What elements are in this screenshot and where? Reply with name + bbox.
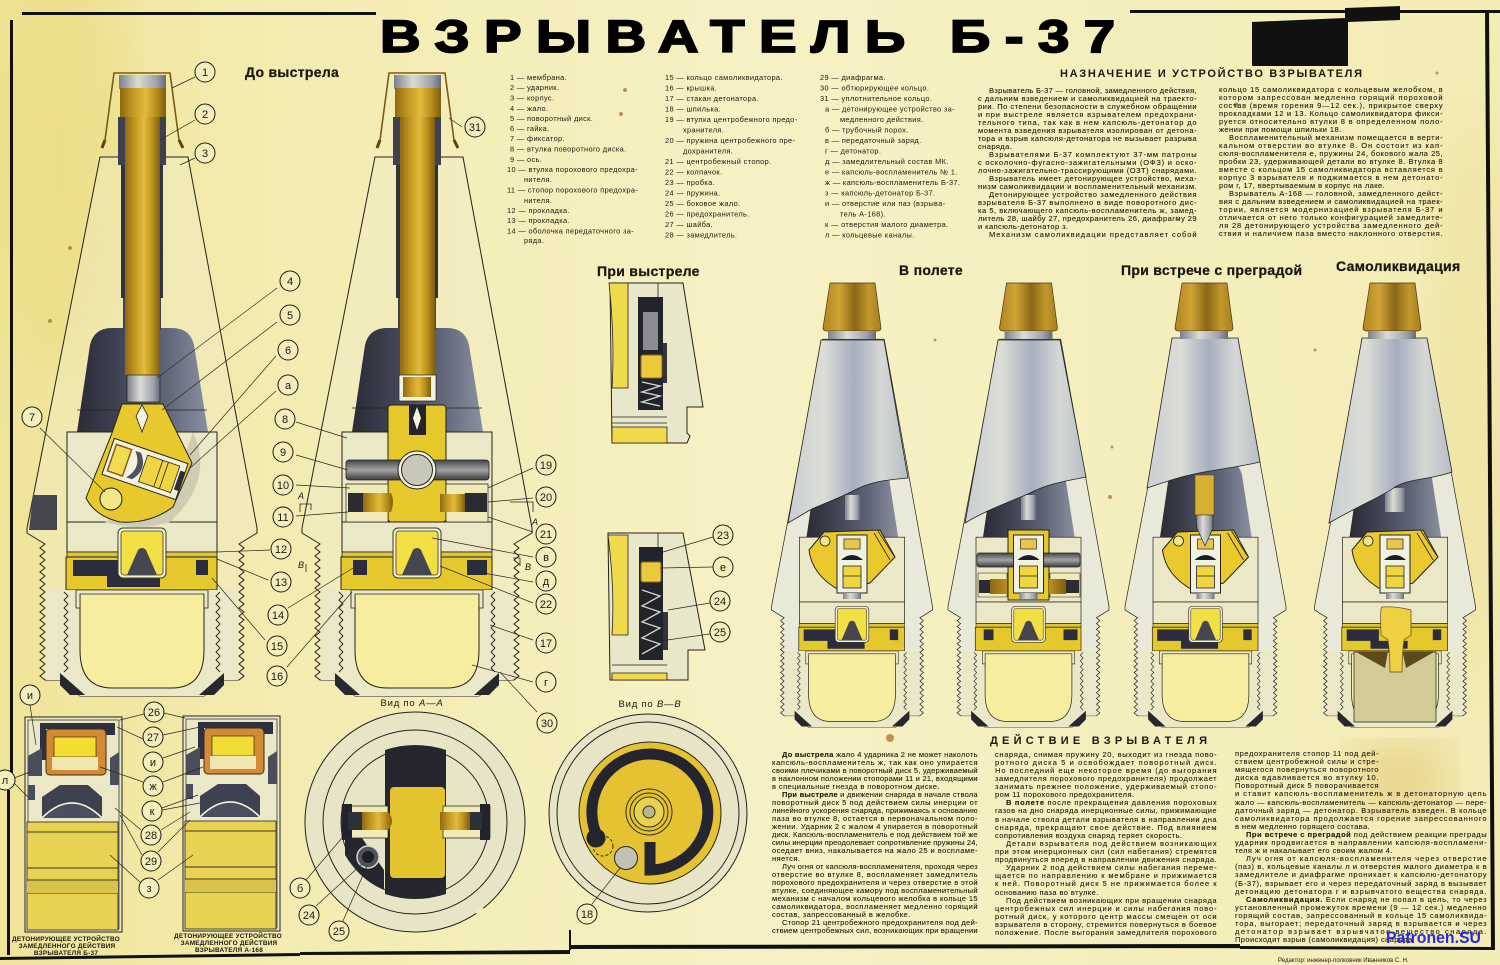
legend of parts: 3 — корпус. <box>510 94 554 102</box>
side view: spring <box>608 533 705 680</box>
legend of parts: д — замедлительный состав МК. <box>825 157 949 166</box>
callouts: detonating device: ж <box>149 781 157 793</box>
text: action of the fuse: Происходит взрыв (самоликвидация) снаряда. <box>1235 935 1415 944</box>
leader lines and callouts: main fuses: 19 <box>540 460 552 472</box>
section view A-A <box>305 698 525 932</box>
heading: firing: При выстреле <box>597 263 700 279</box>
text: action of the fuse: жало — капсюль-воспламенитель — капсюль-детонатор — пере- <box>1235 798 1487 807</box>
legend of parts: 17 — стакан детонатора. <box>665 94 759 103</box>
text: purpose and design: кальном отверстии во втулке 8. Он состоит из кап- <box>1219 141 1443 150</box>
leader lines and callouts: main fuses: д <box>543 576 550 588</box>
text: purpose and design: низм самоликвидации и воспламенительный механизм. <box>978 182 1197 191</box>
callouts: detonating device: 29 <box>145 856 157 868</box>
callouts: section A-A <box>290 838 367 941</box>
text: purpose and design: момента взведения взрывателя изолирован от детона- <box>978 126 1197 135</box>
text: purpose and design <box>978 85 1443 239</box>
text: purpose and design: с дальним взведением и самоликвидацией на траекто- <box>978 94 1197 103</box>
text: purpose and design: Детонирующее устройство замедленного действия <box>989 190 1197 199</box>
leader lines and callouts: main fuses: а <box>285 380 292 392</box>
text: action of the fuse: даточный заряд — детонатор. Взрыватель взведен. В кольце <box>1235 806 1487 815</box>
legend of parts: 9 — ось. <box>510 155 542 164</box>
text: action of the fuse: паза во втулке 8, остается в первоначальном поло- <box>772 814 978 823</box>
caption: detonating device B-37: ЗАМЕДЛЕННОГО ДЕЙСТВИЯ <box>19 941 116 950</box>
text: action of the fuse: при этом инерционных сил (сил набегания) стремятся <box>995 847 1217 856</box>
text: action of the fuse: Луч огня от капсюля-воспламенителя, проходя через <box>782 862 978 871</box>
callouts: detonating device: 27 <box>147 732 159 744</box>
legend of parts: нителя. <box>524 196 552 205</box>
leader lines and callouts: main fuses: В <box>525 562 531 572</box>
leader lines and callouts: main fuses: 1 <box>202 67 208 79</box>
text: action of the fuse: снаряда, прекращают свое действие. Под влиянием <box>995 823 1217 832</box>
text: purpose and design: Механизм самоликвидации представляет собой <box>989 230 1197 239</box>
legend of parts: тель А-168). <box>840 210 886 218</box>
fuse: at impact <box>1125 283 1286 727</box>
leader lines and callouts: main fuses: 22 <box>540 599 552 611</box>
leader lines and callouts: main fuses: 12 <box>275 544 287 556</box>
text: action of the fuse: замедлителя порохового предохранителя) продолжает <box>995 774 1217 783</box>
legend of parts: 15 — кольцо самоликвидатора. <box>665 73 783 82</box>
leader lines and callouts: main fuses: 8 <box>282 414 288 426</box>
legend of parts: к — отверстия малого диаметра. <box>825 220 948 229</box>
caption: detonating device A-168: ДЕТОНИРУЮЩЕЕ УСТРОЙСТВО <box>174 931 282 940</box>
text: purpose and design: тора и взрыв капсюля-детонатора не вызывает разрыва <box>978 134 1197 143</box>
text: purpose and design: лочно-зажигательно-трассирующими (ОЗТ) снарядами. <box>978 166 1197 175</box>
section view B-B: Вид по В—В <box>618 699 682 710</box>
leader lines and callouts: main fuses: 16 <box>271 671 283 683</box>
text: action of the fuse: оседает вниз, накалывается на жало 25 и воспламе- <box>772 846 978 855</box>
callouts: detonating device: 26 <box>148 707 160 719</box>
section view B-B <box>549 699 747 912</box>
fuse diagram: before firing, cross cut <box>302 73 532 696</box>
text: action of the fuse: капсюль-воспламенитель ж, так как оно упирается <box>772 758 978 767</box>
text: action of the fuse: (паз) в, кольцевые каналы л и отверстия малого диаметра к в <box>1235 862 1487 871</box>
callouts: spring view: 23 <box>717 530 729 542</box>
text: purpose and design: тельного типа, так как в нем капсюль-детонатор до <box>978 118 1197 127</box>
title: ВЗРЫВАТЕЛЬ Б-37 <box>380 11 1115 62</box>
fuse: in flight, safe <box>772 283 932 727</box>
text: action of the fuse: Стопор 21 центробежного предохранителя под дей- <box>782 918 978 927</box>
text: action of the fuse: в наклонном положении стопорами 11 и 21, входящими <box>772 774 978 783</box>
legend of parts: 4 — жало. <box>510 104 548 113</box>
callouts: detonating device: л <box>2 775 8 787</box>
fuse: self-destruction <box>1314 283 1476 727</box>
headings: stages <box>899 258 1460 278</box>
text: purpose and design: ля 28 детонирующего устройства замедленного дей- <box>1219 221 1443 230</box>
legend of parts: 29 — диафрагма. <box>820 73 886 82</box>
text: action of the fuse: самоликвидатора, воспламеняет медленно горящий <box>772 902 978 911</box>
headings: stages: При встрече с преградой <box>1121 262 1302 278</box>
legend of parts: 6 — гайка. <box>510 124 549 133</box>
fuse: in flight, armed <box>948 283 1109 727</box>
text: action of the fuse: замедлителе и диафрагме проникает к капсюлю-детонатору <box>1235 870 1487 879</box>
leader lines and callouts: main fuses: 31 <box>469 122 481 134</box>
leader lines and callouts: main fuses: 10 <box>277 480 289 492</box>
leader lines and callouts: main fuses <box>22 62 557 733</box>
text: action of the fuse: Но последний еще некоторое время (до выгорания <box>995 766 1217 775</box>
text: action of the fuse: ром 11 порохового предохранителя. <box>995 790 1134 799</box>
text: action of the fuse: ствием центробежной силы и стре- <box>1235 757 1379 766</box>
legend of parts: ряда. <box>524 236 544 245</box>
text: action of the fuse: При встрече с преградой под действием реакции преграды <box>1246 830 1487 839</box>
legend of parts: 25 — боковое жало. <box>665 199 741 208</box>
legend of parts: хранителя. <box>683 126 724 134</box>
leader lines and callouts: main fuses: 13 <box>275 577 287 589</box>
text: action of the fuse: диска вдавливается во втулку 10. <box>1235 773 1379 782</box>
legend of parts: 30 — обтюрирующее кольцо. <box>820 84 929 92</box>
leader lines and callouts: main fuses: г <box>544 677 548 689</box>
leader lines and callouts: main fuses: В <box>298 560 304 570</box>
text: action of the fuse: состав, запрессованный в желобке. <box>772 910 911 919</box>
legend of parts: и — отверстие или паз (взрыва- <box>825 199 946 208</box>
legend of parts: 24 — пружина. <box>665 188 720 198</box>
legend of parts: 11 — стопор порохового предохра- <box>507 186 638 194</box>
leader lines and callouts: main fuses: 30 <box>541 718 553 730</box>
text: purpose and design: кольцо 15 самоликвидатора с кольцевым желобком, в <box>1219 85 1443 94</box>
legend of parts: 26 — предохранитель. <box>665 210 750 218</box>
text: purpose and design: вместе с кольцом 15 самоликвидатора вставляется в <box>1219 165 1443 174</box>
legend of parts: медленного действия. <box>840 115 923 124</box>
text: action of the fuse: механизм с началом кольцевого желобка в кольце 15 <box>772 894 978 903</box>
caption: detonating device B-37: ДЕТОНИРУЮЩЕЕ УСТРОЙСТВО <box>12 934 120 943</box>
watermark: Patronen.SU <box>1386 928 1481 947</box>
callouts: section A-A: б <box>297 883 303 895</box>
leader lines and callouts: main fuses: 15 <box>271 641 283 653</box>
text: purpose and design: взрывателя Б-37 выполнено в виде поворотного дис- <box>978 198 1197 207</box>
text: purpose and design: и при выстреле является взрывателем предохрани- <box>978 110 1197 119</box>
caption: detonating device A-168: ВЗРЫВАТЕЛЯ А-168 <box>195 947 263 954</box>
text: action of the fuse: детонатор взрывает взрывчатое вещество снаряда. <box>1235 927 1487 936</box>
text: purpose and design: прокладками 12 и 13. Кольцо самоликвидатора фикси- <box>1219 109 1443 118</box>
legend of parts: 27 — шайба. <box>665 220 713 229</box>
text: purpose and design: руется относительно втулки 8 в определенном поло- <box>1219 117 1443 126</box>
text: action of the fuse: тора, выгорает; передаточный заряд в взрывается и через <box>1235 919 1487 928</box>
text: action of the fuse: мящегося повернуться поворотного <box>1235 765 1379 774</box>
text: action of the fuse: взрывателя в сторону, стремится повернуться в боевое <box>995 920 1217 929</box>
text: purpose and design: рии. По степени безопасности в служебном обращении <box>978 102 1197 111</box>
legend of parts: 8 — втулка поворотного диска. <box>510 144 626 154</box>
text: action of the fuse: газов на дно снаряда инерционные силы, прижимающие <box>995 806 1217 815</box>
caption: detonating device A-168: ЗАМЕДЛЕННОГО ДЕЙСТВИЯ <box>181 938 278 947</box>
leader lines and callouts: main fuses: в <box>543 552 549 564</box>
legend of parts: 2 — ударник. <box>510 83 559 92</box>
legend of parts: 13 — прокладка. <box>507 216 570 225</box>
legend of parts: 1 — мембрана. <box>510 73 567 82</box>
legend of parts: а — детонирующее устройство за- <box>825 104 955 114</box>
text: action of the fuse: сопротивления воздуха снаряд теряет скорость. <box>995 831 1182 840</box>
leader lines and callouts: main fuses: А <box>531 517 538 527</box>
callouts: spring view <box>660 525 733 642</box>
caption: detonating device B-37 <box>12 934 120 957</box>
text: action of the fuse: центробежных сил инерции и силы набегания пово- <box>995 904 1217 913</box>
text: action of the fuse: ударник продвигается в направлении капсюля-воспламени- <box>1235 838 1487 847</box>
legend of parts: 18 — шпилька. <box>665 104 721 114</box>
text: action of the fuse: Самоликвидация. Если снаряд не попал в цель, то через <box>1246 895 1487 904</box>
text: purpose and design: пробки 23, удерживающей детали во втулке 8. Втулка 8 <box>1219 157 1443 166</box>
legend of parts: 10 — втулка порохового предохра- <box>507 165 638 174</box>
legend of parts: 21 — центробежный стопор. <box>665 157 772 166</box>
heading: purpose and design: НАЗНАЧЕНИЕ И УСТРОЙСТВО ВЗРЫВАТЕЛЯ <box>1060 67 1365 80</box>
text: purpose and design: ка 5, включающего капсюль-воспламенитель ж, замед- <box>978 206 1197 215</box>
text: purpose and design: ствия и наличием паза вместо наклонного отверстия. <box>1219 229 1443 238</box>
heading: action of the fuse: ДЕЙСТВИЕ ВЗРЫВАТЕЛЯ <box>990 734 1210 747</box>
text: purpose and design: ром г, 17, ввертываемым в корпус на лаке. <box>1219 181 1385 190</box>
text: action of the fuse: в специальные гнезда в поворотном диске. <box>772 782 940 791</box>
headings: stages: В полете <box>899 262 963 278</box>
legend of parts: дохранителя. <box>683 146 733 156</box>
legend of parts: 16 — крышка. <box>665 84 717 92</box>
leader lines and callouts: main fuses: 4 <box>287 276 293 288</box>
text: action of the fuse: В полете после прекращения давления пороховых <box>1006 798 1217 807</box>
text: action of the fuse: самоликвидатора продолжается горение запрессованного <box>1235 814 1487 823</box>
legend of parts: ж — капсюль-воспламенитель Б-37. <box>825 178 960 187</box>
text: action of the fuse: При выстреле и движении снаряда в начале ствола <box>782 790 978 799</box>
callouts: spring view: е <box>720 562 726 574</box>
leader lines and callouts: main fuses: 5 <box>287 310 293 322</box>
text: purpose and design: Взрывателями Б-37 комплектуют 37-мм патроны <box>989 150 1197 159</box>
text: action of the fuse: Ударник 2 под действием силы набегания переме- <box>1006 863 1217 872</box>
text: action of the fuse: поворотный диск 5 под действием силы инерции от <box>772 798 978 807</box>
legend of parts: 14 — оболочка передаточного за- <box>507 226 634 236</box>
legend of parts: з — капсюль-детонатор Б-37. <box>825 188 935 198</box>
text: action of the fuse: ствием центробежных сил, возникающих при вращении <box>772 926 978 935</box>
side view: at firing <box>609 283 703 443</box>
text: action of the fuse: жении. Ударник 2 с жалом 4 упирается в поворотный <box>772 822 978 831</box>
text: action of the fuse: Детали взрывателя под действием возникающих <box>1006 839 1217 848</box>
text: action of the fuse: своими плечиками в поворотный диск 5, удерживаемый <box>772 766 978 775</box>
leader lines and callouts: main fuses: 7 <box>29 412 35 424</box>
text: action of the fuse: в начале ствола детали взрывателя в направлении дна <box>995 815 1217 824</box>
text: action of the fuse: Под действием возникающих при вращении снаряда <box>1006 896 1217 905</box>
section view A-A: Вид по А—А <box>380 698 444 709</box>
text: action of the fuse: продвинуться вперед в направлении движения снаряда. <box>995 855 1217 864</box>
text: action of the fuse: и ставит капсюль-воспламенитель ж в детонаторную цепь <box>1235 789 1487 798</box>
text: action of the fuse: ротный диск, у которого центр массы смещен от оси <box>995 912 1217 921</box>
text: purpose and design: корпус 3 взрывателя и поджимается в нем детонато- <box>1219 173 1443 182</box>
legend of parts: 23 — пробка. <box>665 178 715 187</box>
legend of parts: 19 — втулка центробежного предо- <box>665 115 798 124</box>
callouts: spring view: 24 <box>714 596 726 608</box>
headings: stages: Самоликвидация <box>1336 258 1460 274</box>
text: purpose and design: с осколочно-фугасно-зажигательными (ОФЗ) и оско- <box>978 158 1197 167</box>
text: action of the fuse: втулке, соединяющее камору под воспламенительный <box>772 886 978 895</box>
legend of parts: г — детонатор. <box>825 146 881 156</box>
callouts: section B-B: 18 <box>581 909 593 921</box>
text: action of the fuse: силы инерции преодолевает сопротивление пружины 24, <box>772 838 978 847</box>
text: purpose and design: сюля-воспламенителя е, пружины 24, бокового жала 25, <box>1219 149 1443 158</box>
text: action of the fuse: горящий состав, запрессованный в кольце 15 самоликвида- <box>1235 911 1487 920</box>
text: action of the fuse: отверстие во втулке 8, воспламеняет замедлитель <box>772 870 978 879</box>
legend of parts: 12 — прокладка. <box>507 206 570 215</box>
text: action of the fuse: Луч огня от капсюля-воспламенителя через отверстие <box>1246 854 1487 863</box>
footer credit: Редактор: инженер-полковник Иванников С. Н. <box>1278 958 1409 964</box>
legend of parts: 28 — замедлитель. <box>665 230 737 240</box>
legend of parts: 22 — колпачок. <box>665 168 722 176</box>
text: action of the fuse: установленный промежуток времени (9 — 12 сек.) медленно <box>1235 903 1487 912</box>
callouts: detonating device: и <box>27 690 33 702</box>
text: purpose and design: Воспламенительный механизм помещается в верти- <box>1229 133 1443 142</box>
text: action of the fuse: в нем медленно горящего состава. <box>1235 822 1370 831</box>
text: action of the fuse <box>772 749 1487 944</box>
callouts: spring view: 25 <box>714 627 726 639</box>
text: purpose and design: снаряда. <box>978 142 1012 151</box>
text: purpose and design: жении при помощи шпильки 18. <box>1219 125 1342 134</box>
text: purpose and design: и капсюль-детонатор з. <box>978 222 1068 231</box>
leader lines and callouts: main fuses: 20 <box>540 492 552 504</box>
text: purpose and design: Взрыватель А-168 — головной, замедленного дейст- <box>1229 189 1443 198</box>
detonating device assemblies <box>25 716 280 932</box>
legend of parts <box>507 73 960 245</box>
leader lines and callouts: main fuses: 17 <box>540 638 552 650</box>
callouts: detonating device: и <box>150 757 156 769</box>
text: action of the fuse: ротного диска 5 и освобождает поворотный диск. <box>995 758 1217 767</box>
leader lines and callouts: main fuses: 9 <box>280 447 286 459</box>
text: action of the fuse: няется. <box>772 854 800 863</box>
legend of parts: нителя. <box>524 175 552 184</box>
text: action of the fuse: диск. Капсюль-воспламенитель е под действием той же <box>772 830 978 839</box>
text: purpose and design: отличается от него только конфигурацией замедлите- <box>1219 213 1443 222</box>
caption: detonating device A-168 <box>174 931 282 954</box>
text: action of the fuse: щается по направлению к мембране и прижимается <box>995 871 1217 880</box>
text: action of the fuse: снаряда, снимая пружину 20, выходит из гнезда пово- <box>995 750 1217 759</box>
callouts: detonating device: 28 <box>145 830 157 842</box>
callouts: detonating device <box>0 685 203 898</box>
text: action of the fuse: основанию паза во втулке. <box>995 888 1099 897</box>
legend of parts: 20 — пружина центробежного пре- <box>665 136 796 145</box>
leader lines and callouts: main fuses: 14 <box>272 610 284 622</box>
callouts: section B-B <box>577 868 620 924</box>
leader lines and callouts: main fuses: 11 <box>277 512 289 524</box>
callouts: section A-A: 24 <box>303 910 315 922</box>
text: action of the fuse: До выстрела жало 4 ударника 2 не может наколоть <box>782 750 978 759</box>
text: action of the fuse: (Б-37), взрывает его и через передаточный заряд в вызывает <box>1235 879 1487 888</box>
leader lines and callouts: main fuses: А <box>297 491 304 501</box>
legend of parts: 31 — уплотнительное кольцо. <box>820 94 932 103</box>
leader lines and callouts: main fuses: 21 <box>540 529 552 541</box>
legend of parts: е — капсюль-воспламенитель № 1. <box>825 168 958 176</box>
leader lines and callouts: main fuses: 2 <box>202 109 208 121</box>
text: purpose and design: вия с дальним взведением и самоликвидацией на траек- <box>1219 197 1443 206</box>
text: action of the fuse: детонацию детонатора г и взрывчатого вещества снаряда. <box>1235 887 1487 896</box>
text: purpose and design: тории, является модернизацией взрывателя Б-37 и <box>1219 205 1443 214</box>
legend of parts: л — кольцевые каналы. <box>825 230 915 240</box>
text: action of the fuse: положение. После выгорания замедлителя порохового <box>995 928 1217 937</box>
caption: detonating device B-37: ВЗРЫВАТЕЛЯ Б-37 <box>34 950 98 957</box>
leader lines and callouts: main fuses: 3 <box>202 148 208 160</box>
text: purpose and design: Взрыватель Б-37 — головной, замедленного действия, <box>989 86 1197 95</box>
legend of parts: 7 — фиксатор. <box>510 134 565 143</box>
leader lines and callouts: main fuses: 6 <box>285 345 291 357</box>
text: purpose and design: котором запрессован медленно горящий пороховой <box>1219 93 1443 102</box>
fuse diagram: before firing, side cut <box>27 73 257 696</box>
text: action of the fuse: предохранителя стопор 11 под дей- <box>1235 749 1379 758</box>
text: action of the fuse: занимать прежнее положение, удерживаемый стопо- <box>995 782 1217 791</box>
text: action of the fuse: порохового предохранителя и через отверстие в этой <box>772 878 978 887</box>
legend of parts: 5 — поворотный диск. <box>510 114 593 123</box>
text: purpose and design: состав (время горения 9—12 сек.), прикрытое сверху <box>1219 101 1443 110</box>
text: action of the fuse: теля ж и накалывает его своим жалом 4. <box>1235 846 1393 855</box>
text: purpose and design: литель 28, шайбу 27, предохранитель 26, диафрагму 29 <box>978 214 1197 223</box>
heading: before firing: До выстрела <box>245 64 339 80</box>
text: action of the fuse: Поворотный диск 5 поворачивается <box>1235 781 1379 790</box>
legend of parts: в — передаточный заряд. <box>825 136 921 145</box>
text: action of the fuse: линейного ускорения снаряда, прижимаясь к основанию <box>772 806 978 815</box>
text: action of the fuse: к ней. Поворотный диск 5 не прижимается более к <box>995 879 1217 888</box>
callouts: detonating device: з <box>146 883 152 895</box>
callouts: detonating device: к <box>150 806 155 818</box>
callouts: section A-A: 25 <box>333 926 345 938</box>
text: purpose and design: Взрыватель имеет детонирующее устройство, меха- <box>989 174 1197 183</box>
legend of parts: б — трубочный порох. <box>825 126 909 134</box>
